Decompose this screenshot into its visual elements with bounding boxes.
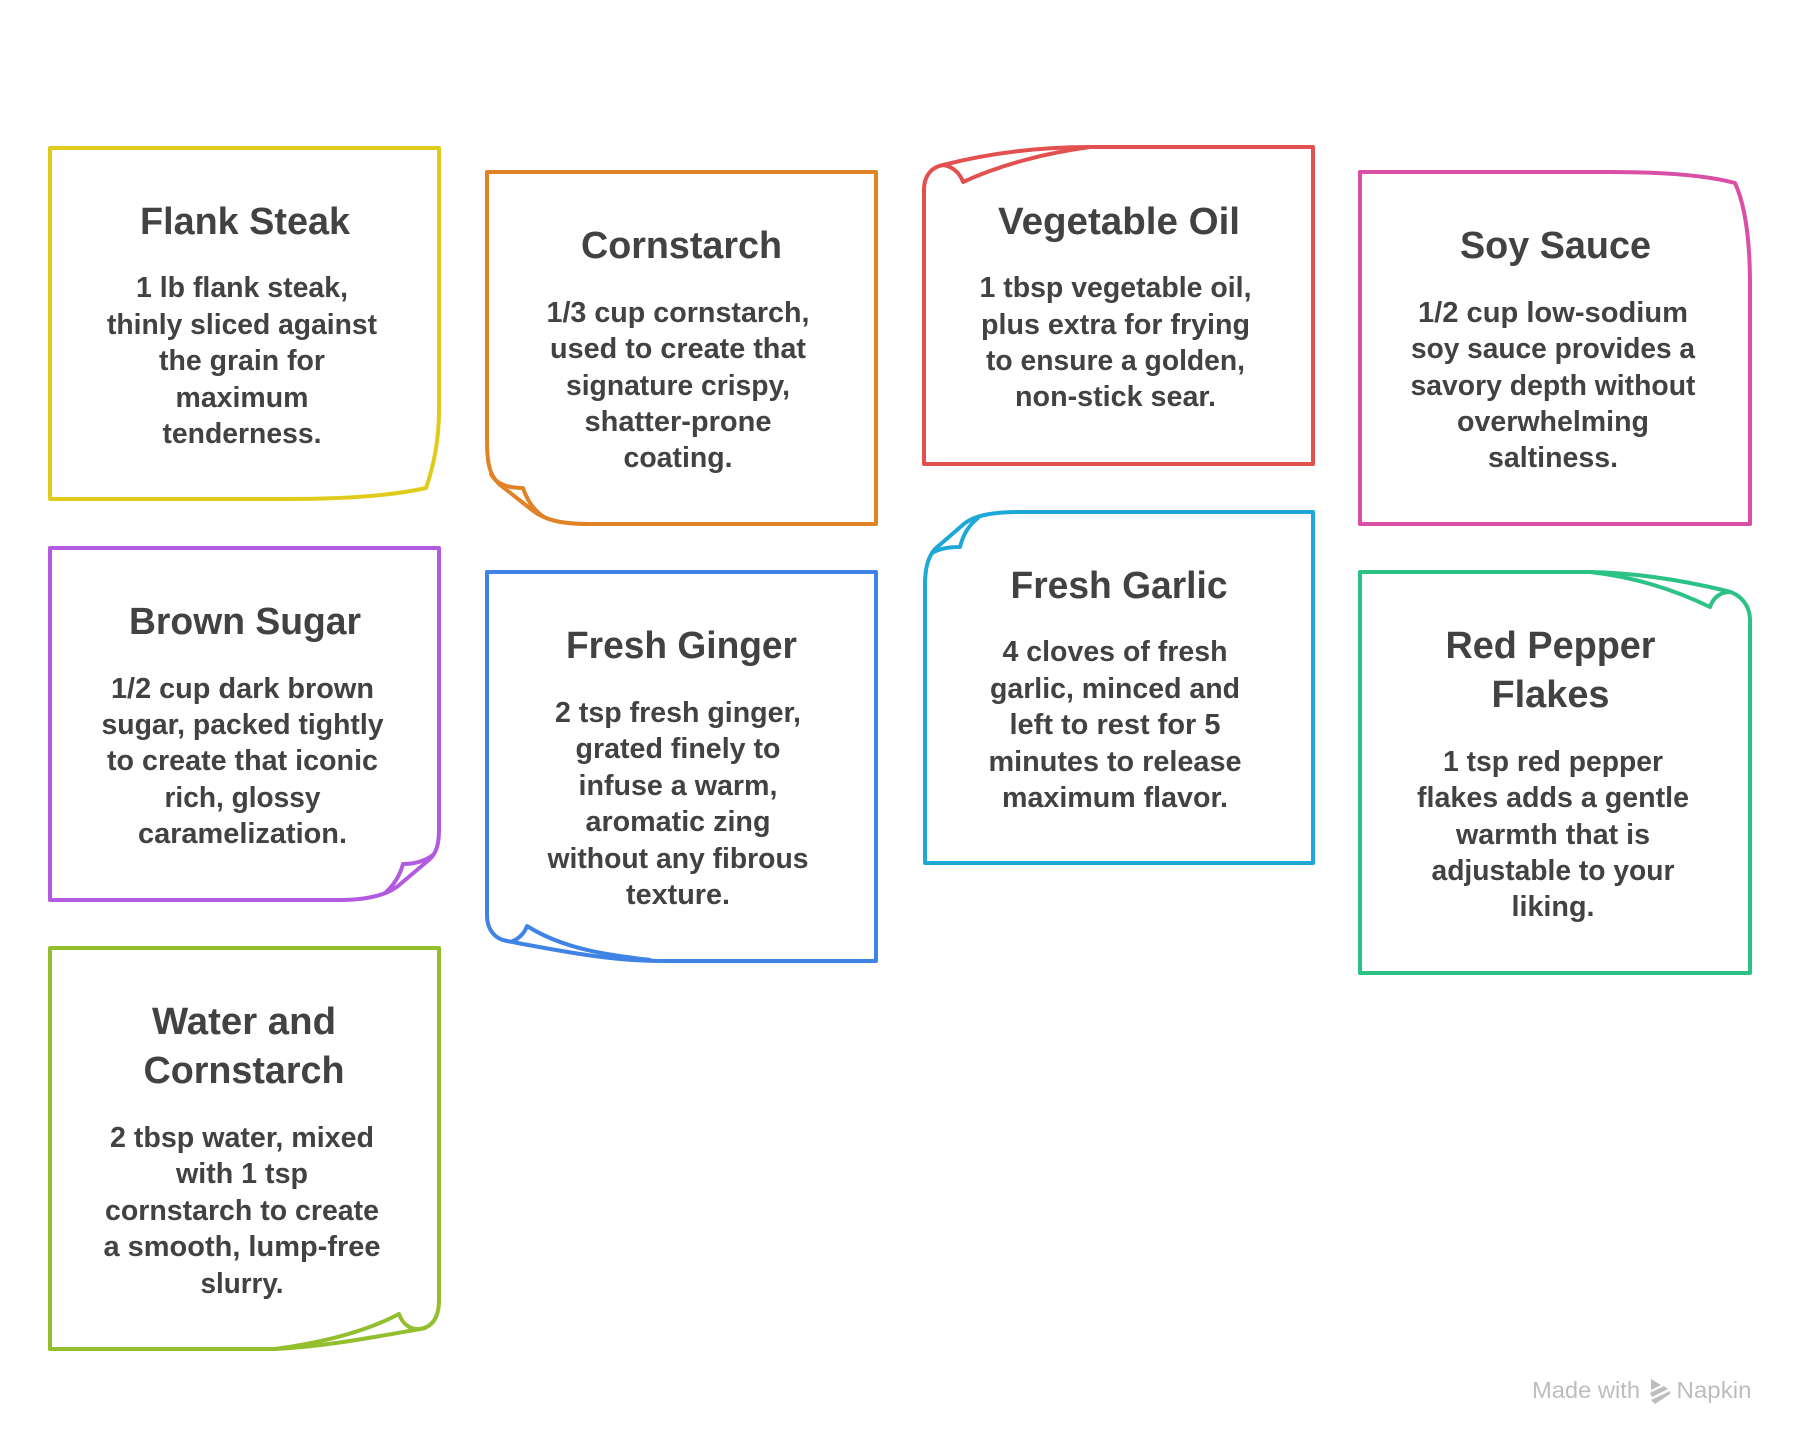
heading: Soy Sauce: Soy Sauce — [1460, 225, 1651, 267]
text: Vegetable Oil description: plus extra for frying — [981, 309, 1250, 341]
watermark: Made with Napkin: Made with — [1532, 1377, 1640, 1403]
heading: Water and Cornstarch — [144, 1001, 344, 1092]
text: Soy Sauce description: saltiness. — [1488, 442, 1618, 474]
text: Fresh Garlic description — [988, 636, 1242, 814]
text: Cornstarch description: shatter-prone — [584, 406, 772, 438]
text: Cornstarch description: used to create that — [550, 333, 806, 365]
text: Brown Sugar description: sugar, packed tightly — [102, 709, 384, 741]
text: Water and Cornstarch description: slurry. — [200, 1268, 284, 1300]
card: Flank Steak — [50, 148, 439, 499]
heading: Red Pepper Flakes: Flakes — [1492, 674, 1610, 716]
text: Red Pepper Flakes description: 1 tsp red pepper — [1443, 746, 1663, 778]
card: Cornstarch — [487, 172, 876, 524]
text: Soy Sauce description: soy sauce provides a — [1411, 333, 1696, 365]
card: Water and Cornstarch — [50, 948, 439, 1349]
text: Soy Sauce description: savory depth without — [1410, 370, 1696, 402]
heading: Cornstarch: Cornstarch — [581, 225, 782, 267]
heading: Fresh Garlic: Fresh Garlic — [1010, 565, 1228, 607]
text: Red Pepper Flakes description: warmth that is — [1455, 819, 1650, 851]
text: Brown Sugar description: 1/2 cup dark brown — [111, 673, 374, 705]
text: Water and Cornstarch description: 2 tbsp water, mixed — [110, 1122, 374, 1154]
text: Flank Steak description — [107, 272, 377, 450]
text: Cornstarch description: coating. — [624, 442, 732, 474]
text: Flank Steak description: the grain for — [159, 345, 325, 377]
text: Fresh Ginger description: texture. — [626, 879, 730, 911]
heading: Brown Sugar: Brown Sugar — [129, 601, 361, 643]
card: Brown Sugar — [50, 548, 439, 900]
card: Vegetable Oil — [924, 147, 1313, 464]
text: Fresh Ginger description: infuse a warm, — [578, 770, 778, 802]
text: Soy Sauce description — [1410, 297, 1696, 474]
text: Fresh Ginger description: 2 tsp fresh ginger, — [555, 697, 801, 729]
card: Soy Sauce — [1360, 172, 1750, 524]
heading: Red Pepper Flakes — [1446, 625, 1656, 716]
text: Red Pepper Flakes description: liking. — [1512, 891, 1594, 923]
heading: Flank Steak: Flank Steak — [140, 201, 351, 243]
heading: Water and Cornstarch: Water and — [152, 1001, 336, 1043]
text: Fresh Garlic description: minutes to release — [988, 746, 1242, 778]
card: Fresh Ginger — [487, 572, 876, 961]
heading: Vegetable Oil: Vegetable Oil — [998, 201, 1240, 243]
heading: Red Pepper Flakes: Red Pepper — [1446, 625, 1656, 667]
text: Fresh Ginger description: grated finely to — [576, 733, 780, 765]
watermark: Made with Napkin — [1532, 1377, 1752, 1404]
text: Brown Sugar description: caramelization. — [138, 818, 347, 850]
icon: Napkin logo — [1650, 1379, 1670, 1404]
text: Red Pepper Flakes description — [1417, 746, 1689, 923]
card: Red Pepper Flakes — [1360, 572, 1750, 973]
text: Water and Cornstarch description: with 1 tsp — [175, 1158, 308, 1190]
heading: Water and Cornstarch: Cornstarch — [144, 1050, 344, 1092]
watermark: Made with Napkin: Napkin — [1676, 1377, 1752, 1403]
text: Brown Sugar description — [102, 673, 384, 850]
text: Flank Steak description: 1 lb flank steak, — [136, 272, 348, 304]
text: Red Pepper Flakes description: adjustable to your — [1432, 855, 1674, 887]
text: Brown Sugar description: to create that iconic — [107, 745, 378, 777]
text: Cornstarch description — [546, 297, 810, 474]
text: Vegetable Oil description: 1 tbsp vegetable oil, — [980, 272, 1252, 304]
text: Flank Steak description: tenderness. — [162, 418, 322, 450]
text: Fresh Ginger description: without any fibrous — [547, 843, 808, 875]
text: Fresh Ginger description — [547, 697, 808, 911]
text: Cornstarch description: 1/3 cup cornstarch, — [546, 297, 810, 329]
card: Fresh Garlic — [925, 512, 1313, 863]
text: Fresh Garlic description: maximum flavor. — [1002, 782, 1228, 814]
text: Water and Cornstarch description: a smooth, lump-free — [104, 1231, 380, 1263]
text: Flank Steak description: thinly sliced against — [107, 309, 377, 341]
text: Water and Cornstarch description: cornstarch to create — [105, 1195, 379, 1227]
text: Soy Sauce description: 1/2 cup low-sodium — [1418, 297, 1688, 329]
heading: Fresh Ginger: Fresh Ginger — [566, 625, 797, 667]
text: Fresh Garlic description: garlic, minced and — [990, 673, 1240, 705]
text: Fresh Ginger description: aromatic zing — [586, 806, 770, 838]
text: Soy Sauce description: overwhelming — [1457, 406, 1649, 438]
text: Fresh Garlic description: 4 cloves of fresh — [1002, 636, 1228, 668]
text: Vegetable Oil description: to ensure a golden, — [986, 345, 1245, 377]
text: Brown Sugar description: rich, glossy — [164, 782, 320, 814]
text: Water and Cornstarch description — [104, 1122, 380, 1300]
text: Vegetable Oil description — [980, 272, 1252, 413]
text: Flank Steak description: maximum — [176, 382, 308, 414]
text: Fresh Garlic description: left to rest for 5 — [1010, 709, 1220, 741]
text: Cornstarch description: signature crispy, — [566, 370, 790, 402]
text: Red Pepper Flakes description: flakes adds a gentle — [1417, 782, 1689, 814]
text: Vegetable Oil description: non-stick sear. — [1015, 381, 1216, 413]
